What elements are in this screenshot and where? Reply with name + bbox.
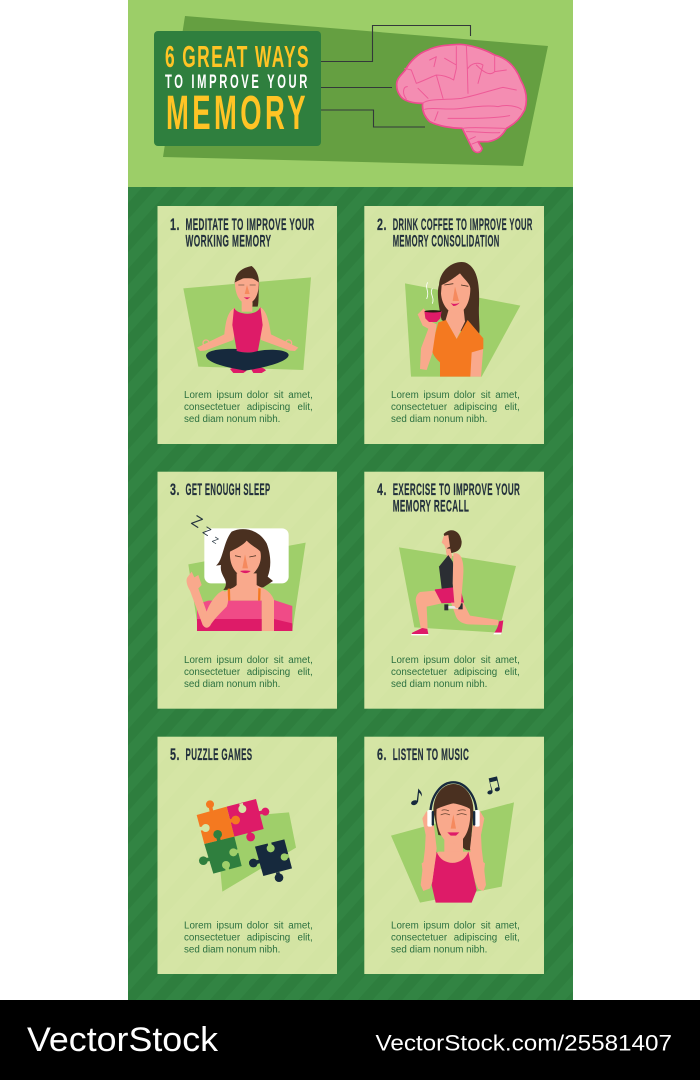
body text 3: amet, (288, 655, 313, 666)
body text 6: Lorem (391, 920, 419, 932)
panel 6: music: LISTEN TO MUSIC (393, 746, 469, 764)
body text 5: dolor (247, 920, 269, 932)
heading 2: MEMORY CONSOLIDATION (393, 233, 500, 251)
body text 5: consectetuer (184, 932, 241, 944)
illustration: woman listening to music (391, 776, 514, 903)
body text 1: ipsum (216, 390, 243, 401)
body text 1: adipiscing (247, 402, 290, 413)
illustration: woman meditating (183, 266, 311, 373)
body text 1: sed diam nonum nibh. (184, 414, 280, 425)
illustration: woman sleeping (187, 512, 306, 631)
body text 6: consectetuer (391, 932, 448, 944)
illustration: woman sleeping: Z (200, 525, 213, 539)
body text 1: Lorem (184, 390, 212, 401)
illustration: woman exercising (399, 530, 516, 635)
body text 3: ipsum (216, 655, 243, 666)
body text 3: sit (274, 655, 284, 666)
body text 1: elit, (298, 402, 313, 413)
body text 2: Lorem (391, 390, 419, 401)
body text 4: amet, (495, 655, 520, 666)
panel 6: music (364, 737, 544, 974)
text: DRINK COFFEE TO IMPROVE YOUR (393, 216, 533, 234)
body text 2: amet, (495, 390, 520, 401)
panel 5: puzzle (158, 737, 337, 974)
body text 2: dolor (454, 390, 476, 401)
body text 2: consectetuer (391, 402, 448, 413)
body text 4: sed diam nonum nibh. (391, 679, 487, 690)
heading 4: MEMORY RECALL (393, 498, 469, 516)
body text 5: ipsum (216, 920, 243, 932)
panel 5: puzzle: PUZZLE GAMES (186, 746, 252, 764)
header band (128, 0, 573, 187)
body text 6: ipsum (424, 920, 450, 932)
body text 2: elit, (504, 402, 520, 413)
title line 3: MEMORY (166, 87, 309, 140)
body text 2: ipsum (424, 390, 450, 401)
body text 6: elit, (504, 932, 520, 944)
illustration: woman sleeping: Z (188, 512, 205, 532)
connector lines (321, 26, 470, 127)
title box (154, 31, 321, 146)
body text 1: amet, (288, 390, 313, 401)
body text 4: consectetuer (391, 667, 448, 678)
body text 2: sed diam nonum nibh. (391, 414, 487, 425)
body text 6: adipiscing (454, 932, 497, 944)
body text 1: sit (274, 390, 284, 401)
illustration: woman drinking coffee (405, 262, 520, 377)
body text 6: amet, (495, 920, 520, 932)
panel 3: sleep: GET ENOUGH SLEEP (186, 481, 270, 499)
body text 3: Lorem (184, 655, 212, 666)
body text 3: elit, (298, 667, 313, 678)
body text 4: Lorem (391, 655, 419, 666)
heading 1: WORKING MEMORY (186, 233, 272, 251)
heading 1 (170, 216, 314, 251)
heading 2: 2. (377, 216, 387, 234)
body text 3: adipiscing (247, 667, 290, 678)
heading 6 (377, 746, 469, 764)
body text 5: sit (274, 920, 284, 932)
panel 3: sleep (158, 472, 337, 709)
body text 1: dolor (247, 390, 269, 401)
header dark green shape (163, 16, 548, 166)
heading 5: 5. (170, 746, 180, 764)
panel 2: coffee (364, 206, 544, 444)
body text 3: consectetuer (184, 667, 241, 678)
body text 4: elit, (504, 667, 520, 678)
body text 2: sit (481, 390, 491, 401)
panel 4: exercise (364, 472, 544, 709)
body text 5: Lorem (184, 920, 212, 932)
watermark bar (0, 1000, 700, 1080)
body text 3: sed diam nonum nibh. (184, 679, 280, 690)
heading 1: 1. (170, 216, 180, 234)
body text 5: sed diam nonum nibh. (184, 944, 280, 956)
striped green background (128, 187, 573, 1000)
watermark logo: VectorStock (27, 1021, 219, 1059)
icon: brain (397, 44, 526, 152)
heading 6: 6. (377, 746, 387, 764)
body text 3: dolor (247, 655, 269, 666)
watermark url: VectorStock.com/25581407 (376, 1031, 672, 1056)
panel 1: meditate: MEDITATE TO IMPROVE YOUR (186, 216, 314, 234)
body text 5: elit, (298, 932, 313, 944)
panel 4: exercise: EXERCISE TO IMPROVE YOUR (393, 481, 520, 499)
panel 1: meditate (158, 206, 337, 444)
body text 4: dolor (454, 655, 476, 666)
heading 5 (170, 746, 252, 764)
heading 4: 4. (377, 481, 387, 499)
heading 2 (377, 216, 533, 251)
body text 6: dolor (454, 920, 476, 932)
illustration: puzzle pieces (197, 799, 296, 892)
title line 2: TO IMPROVE YOUR (165, 72, 310, 93)
body text 4: ipsum (424, 655, 450, 666)
heading 3: 3. (170, 481, 180, 499)
body text 2: adipiscing (454, 402, 497, 413)
body text 6: sit (481, 920, 491, 932)
body text 4: sit (481, 655, 491, 666)
illustration: woman sleeping: Z (211, 535, 221, 546)
body text 1: consectetuer (184, 402, 241, 413)
body text 6: sed diam nonum nibh. (391, 944, 487, 956)
heading 4 (377, 481, 520, 516)
body text 4: adipiscing (454, 667, 497, 678)
body text 5: amet, (288, 920, 313, 932)
title line 1: 6 GREAT WAYS (165, 39, 310, 74)
body text 5: adipiscing (247, 932, 290, 944)
heading 3 (170, 481, 270, 499)
